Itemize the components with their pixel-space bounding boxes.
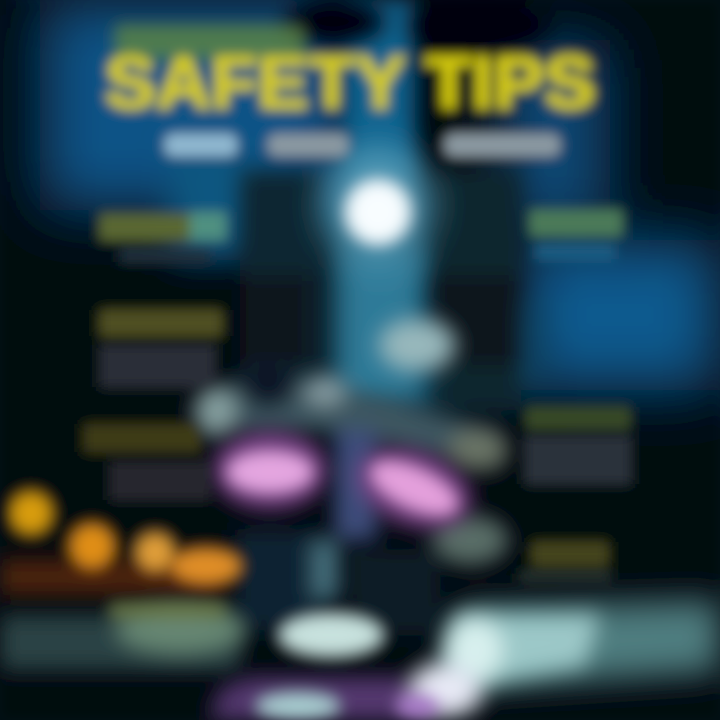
right tip 2 [525,407,631,484]
towers [235,170,521,635]
bridge deck [195,361,508,600]
right tip 1 [530,210,622,259]
moon glow [323,145,433,265]
bottom left caption [110,604,225,618]
subtitle [165,134,560,156]
pale cloud [379,319,455,371]
orange street lights [0,491,242,594]
right tip 3 [520,542,610,580]
ground slabs [0,600,720,720]
title: SAFETY TIPS [105,41,595,124]
left tip 1 [100,212,226,262]
left tip 2 [100,310,222,387]
left tip 3 [84,424,210,500]
pink lights [214,432,481,542]
